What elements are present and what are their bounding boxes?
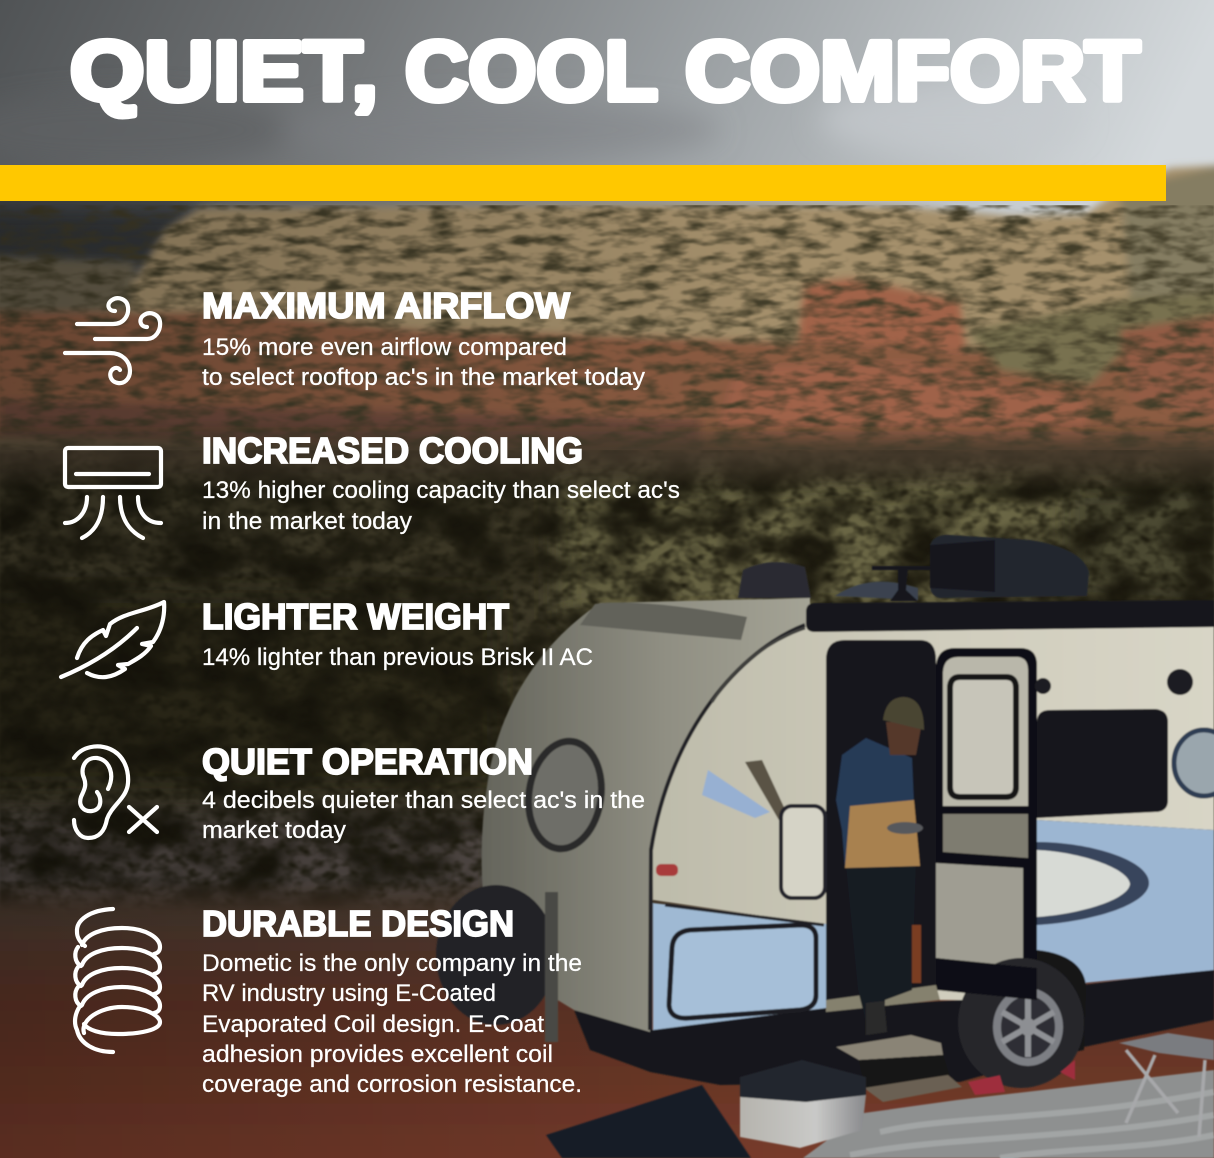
side handle <box>781 806 825 898</box>
rooftop AC unit <box>930 535 1089 598</box>
person jacket <box>836 738 920 868</box>
trailer logo right <box>1174 730 1214 796</box>
tail light <box>656 864 678 876</box>
foreground ground items <box>546 1033 1214 1158</box>
heading: durable design: DURABLE DESIGN <box>202 903 514 944</box>
description: durable design: coverage and corrosion resistance. <box>202 1071 582 1098</box>
icon: wind <box>65 298 160 383</box>
icon: ear with cross <box>74 746 157 838</box>
trailer blue panels <box>653 903 826 1030</box>
title: COMFORT <box>685 24 1140 118</box>
title: QUIET, <box>70 24 378 118</box>
description: maximum airflow <box>202 334 645 391</box>
heading: increased cooling: INCREASED COOLING <box>202 430 583 471</box>
storage box <box>740 1060 866 1148</box>
item: quiet operation <box>74 741 645 844</box>
description: durable design: RV industry using E-Coated <box>202 980 496 1007</box>
underbody shadow <box>574 968 1214 1085</box>
heading: quiet operation: QUIET OPERATION <box>202 741 533 782</box>
description: increased cooling: 13% higher cooling capacity than select ac's <box>202 477 680 504</box>
round vents <box>1167 669 1193 695</box>
item: durable design <box>75 903 582 1098</box>
description: increased cooling <box>202 477 680 535</box>
tread step <box>826 985 940 1012</box>
trailer cream side <box>652 625 1214 1000</box>
wheel <box>958 950 1086 1088</box>
door opening <box>826 640 936 1000</box>
person plate <box>887 822 923 834</box>
item: increased cooling <box>65 430 680 538</box>
trailer window <box>1037 709 1168 818</box>
icon: coil <box>75 909 160 1052</box>
description: increased cooling: in the market today <box>202 508 412 535</box>
description: durable design: adhesion provides excellent coil <box>202 1041 553 1068</box>
item: maximum airflow <box>65 285 645 391</box>
description: maximum airflow: 15% more even airflow compared <box>202 334 567 361</box>
person face <box>886 722 922 755</box>
title: COOL <box>405 24 658 118</box>
person shoe <box>866 1001 887 1035</box>
person <box>836 697 924 1035</box>
description: maximum airflow: to select rooftop ac's in the market today <box>202 364 645 391</box>
bottle <box>912 925 921 983</box>
awning <box>806 600 1214 632</box>
description: lighter weight: 14% lighter than previous Brisk II AC <box>202 644 593 671</box>
heading: lighter weight: LIGHTER WEIGHT <box>202 596 509 637</box>
solar panel <box>546 1085 751 1158</box>
spare tire rack <box>545 892 558 1042</box>
lower hatch <box>669 925 816 1018</box>
wheel chocks <box>968 1060 1075 1095</box>
description: durable design: Evaporated Coil design. E-Coat <box>202 1011 544 1038</box>
person legs <box>846 862 916 1022</box>
kayak decal <box>702 770 770 818</box>
table <box>1119 1033 1214 1137</box>
item: lighter weight <box>61 596 593 677</box>
steps <box>836 1035 962 1102</box>
title <box>70 24 1140 118</box>
description: quiet operation: market today <box>202 817 346 844</box>
spare tire <box>436 885 556 1025</box>
description: quiet operation <box>202 787 645 844</box>
icon: air conditioner <box>65 448 161 538</box>
trailer logo rear <box>522 737 608 853</box>
icon: feather <box>61 602 164 677</box>
description: durable design: Dometic is the only company in the <box>202 950 582 977</box>
door lower black edge <box>936 958 1037 1000</box>
rooftop antenna dome <box>738 562 811 598</box>
person hat <box>883 697 924 730</box>
open door <box>936 648 1037 1000</box>
background: sky <box>0 0 1214 300</box>
description: quiet operation: 4 decibels quieter than select ac's in the <box>202 787 645 814</box>
trailer roof strip <box>580 603 747 640</box>
rooftop vent and mount <box>835 582 918 600</box>
trailer <box>436 535 1214 1102</box>
rug <box>803 1070 1214 1158</box>
yellow divider bar <box>0 165 1166 201</box>
trailer rear shell <box>482 598 810 1032</box>
trailer trim line <box>650 625 805 1030</box>
description: durable design <box>202 950 582 1098</box>
heading: maximum airflow: MAXIMUM AIRFLOW <box>202 285 570 326</box>
